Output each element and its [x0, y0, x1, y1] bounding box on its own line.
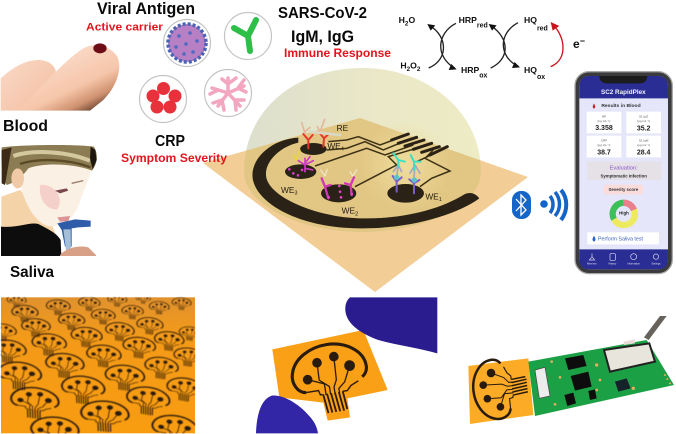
- green circuit board: [528, 340, 674, 416]
- electrode labels: WE: [425, 191, 439, 201]
- icon: viral antigen: [164, 20, 210, 66]
- label: Saliva: Saliva: [10, 264, 54, 281]
- bottom navigation: History: [608, 263, 617, 266]
- reaction labels: 2: [407, 66, 411, 73]
- silver module: [604, 343, 655, 372]
- electrode labels: RE: [337, 123, 349, 133]
- photo: finger with blood drop: [1, 43, 119, 111]
- app title: SC2 RapidPlex: [601, 89, 646, 96]
- result card S1 IgG: 35.2: [637, 126, 651, 133]
- lips: [57, 216, 70, 222]
- WE2 bioreceptors: [321, 169, 357, 198]
- sensor on dome: [252, 119, 479, 228]
- reaction arrows: [429, 23, 519, 68]
- heading: SARS-CoV-2: SARS-CoV-2: [278, 5, 367, 22]
- result card S1 IgM: (µg mL⁻¹): [637, 143, 650, 147]
- icon: CRP: [140, 76, 186, 122]
- icon: antibody: [224, 12, 272, 60]
- saliva test button: Perform Saliva test: [598, 236, 644, 242]
- saliva test button: [587, 232, 659, 244]
- hair: [1, 145, 97, 185]
- evaluation panel: Symptomatic Infection: [600, 174, 647, 179]
- red electron arrow: [551, 22, 563, 67]
- result card NP: [587, 112, 621, 133]
- electrode labels: WE: [327, 141, 341, 151]
- result card NP: NP: [602, 115, 606, 119]
- reaction labels: HRP: [461, 65, 479, 75]
- label: Active carrier: Active carrier: [86, 22, 164, 34]
- reaction labels: red: [477, 23, 488, 30]
- reaction labels: O: [408, 15, 415, 25]
- blood drop: [93, 43, 107, 53]
- reaction labels: 2: [417, 66, 421, 73]
- icon: bluetooth: [512, 191, 531, 219]
- chips: [565, 355, 587, 370]
- label: Blood: Blood: [3, 118, 48, 135]
- hand: [60, 246, 96, 256]
- glass dome: [244, 68, 481, 232]
- printed sensor pattern: [288, 339, 373, 418]
- electrode labels: 2: [355, 211, 358, 217]
- severity badge: Severity score: [609, 187, 639, 192]
- WE1 analyte: [394, 175, 417, 183]
- label: electron: −: [580, 36, 585, 46]
- severity gauge: [613, 203, 635, 225]
- reaction labels: ox: [479, 73, 488, 80]
- right finger: [18, 45, 119, 111]
- result card NP: 3.358: [595, 125, 613, 132]
- counter electrode: [252, 138, 479, 228]
- severity gauge: High: [619, 210, 629, 215]
- result card CRP: (µg mL⁻¹): [598, 143, 610, 147]
- bottom left glove: [256, 395, 318, 433]
- bottom navigation: New test: [587, 263, 597, 266]
- result card CRP: CRP: [601, 139, 607, 143]
- evaluation panel: Evaluation:: [610, 166, 638, 172]
- tan substrate: [203, 118, 528, 292]
- bottom navigation: Settings: [651, 263, 661, 266]
- electrode labels: 4: [341, 147, 344, 153]
- result card S1 IgG: [626, 112, 661, 133]
- working electrodes: [285, 143, 424, 203]
- label: Symptom Severity: Symptom Severity: [121, 153, 228, 165]
- reaction scheme: [399, 15, 563, 81]
- electrode labels: 3: [294, 191, 298, 197]
- photo: sensor sheet array: [0, 293, 204, 434]
- WE3 dots: [288, 168, 303, 177]
- photo: sensor attached to circuit board: [468, 316, 674, 424]
- tweezers: [644, 316, 667, 340]
- result card S1 IgG: S1 IgG: [639, 115, 649, 119]
- severity badge: [603, 185, 643, 194]
- result card S1 IgG: (µg mL⁻¹): [637, 119, 650, 123]
- electrode labels: WE: [342, 206, 355, 216]
- heading: IgM, IgG: IgM, IgG: [291, 28, 354, 46]
- reaction labels: red: [537, 25, 548, 32]
- contact pads: [392, 134, 447, 155]
- photo: woman using saliva collector: [1, 145, 97, 256]
- left finger: [1, 60, 56, 111]
- solder pads: [550, 360, 671, 406]
- results heading: Results in Blood: [601, 103, 641, 109]
- result card S1 IgM: S1 IgM: [639, 139, 649, 143]
- blue collector: [57, 219, 91, 247]
- arrow heads: [427, 24, 520, 70]
- icon: dendrimer: [204, 70, 252, 116]
- black top: [1, 223, 61, 256]
- photo: flexible sensor held by gloved fingers: [256, 297, 437, 433]
- reaction labels: H: [400, 61, 407, 71]
- icon: wireless signal: [540, 190, 566, 220]
- reaction labels: [399, 15, 548, 81]
- reaction labels: ox: [537, 74, 545, 81]
- reaction labels: HQ: [524, 65, 537, 75]
- face: [19, 161, 91, 226]
- WE4 bioreceptors: [302, 119, 340, 148]
- app header: [579, 76, 668, 98]
- result card S1 IgM: [626, 136, 661, 157]
- orange sensor card: [272, 330, 388, 421]
- phone body: [575, 72, 672, 274]
- reaction labels: HRP: [459, 15, 477, 25]
- label: Immune Response: Immune Response: [284, 48, 391, 60]
- bottom navigation: Information: [627, 263, 640, 266]
- WE1 bioreceptors: [393, 153, 421, 193]
- notch: [599, 76, 647, 83]
- screen: [579, 76, 668, 269]
- result card CRP: 38.7: [597, 149, 611, 156]
- reaction labels: 2: [405, 20, 409, 27]
- evaluation panel: [587, 162, 661, 180]
- top right glove: [345, 297, 437, 353]
- WE3 bioreceptors: [293, 150, 313, 172]
- electrode labels: [281, 123, 442, 217]
- traces: [315, 137, 450, 187]
- reaction labels: O: [410, 61, 417, 71]
- result card S1 IgM: 28.4: [637, 149, 651, 156]
- reaction labels: HQ: [524, 15, 537, 25]
- phone: [575, 72, 672, 274]
- printed sensor pattern: [470, 356, 530, 421]
- eyes: [55, 188, 68, 193]
- neck and shoulder skin: [1, 190, 57, 237]
- electrode labels: 1: [439, 197, 442, 203]
- orange sensor card: [468, 358, 533, 424]
- connector: [535, 367, 550, 398]
- heading: CRP: CRP: [155, 133, 185, 150]
- ear: [11, 168, 24, 188]
- reaction labels: H: [399, 15, 405, 25]
- bottom navigation: [579, 249, 668, 269]
- electrode labels: WE: [281, 185, 294, 195]
- WE2 dots: [327, 185, 353, 199]
- label: electron: e: [573, 37, 580, 51]
- result card CRP: [587, 136, 621, 157]
- result card NP: (ng mL⁻¹): [598, 119, 610, 123]
